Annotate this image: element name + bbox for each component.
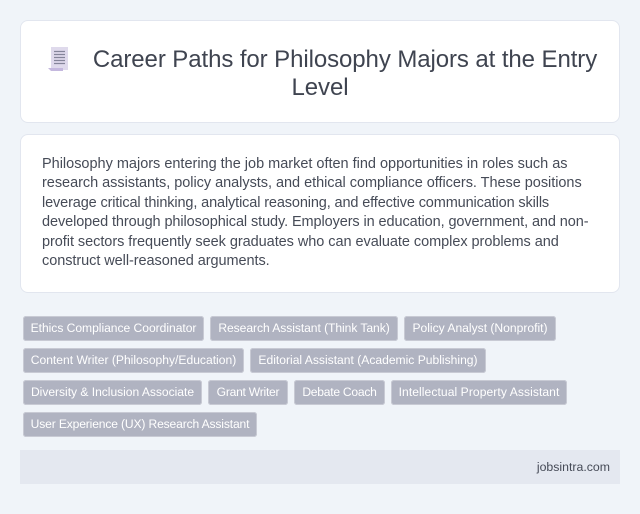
tag: Content Writer (Philosophy/Education) xyxy=(31,353,236,367)
description text xyxy=(42,156,588,269)
icon: document scroll xyxy=(48,47,68,71)
tag: Grant Writer xyxy=(217,385,279,399)
description text: profit sectors frequently seek graduates who can evaluate complex problems and xyxy=(42,234,559,250)
tag: Diversity & Inclusion Associate xyxy=(31,385,194,399)
panel: description card xyxy=(20,134,620,293)
tag xyxy=(294,380,385,405)
footer bar xyxy=(20,450,620,484)
tag: Policy Analyst (Nonprofit) xyxy=(412,321,548,335)
tag xyxy=(23,412,257,437)
tag: Ethics Compliance Coordinator xyxy=(31,321,196,335)
footer source text: jobsintra.com xyxy=(537,460,610,474)
tag xyxy=(208,380,288,405)
tag xyxy=(23,316,204,341)
description text: leverage critical thinking, analytical reasoning, and effective communication skills xyxy=(42,195,549,211)
tag xyxy=(391,380,567,405)
title: Career Paths for Philosophy Majors at the Entry xyxy=(93,46,597,73)
tag: Editorial Assistant (Academic Publishing) xyxy=(258,353,478,367)
tag: Intellectual Property Assistant xyxy=(399,385,559,399)
title xyxy=(93,46,598,101)
panel: title card xyxy=(20,20,620,123)
title: Level xyxy=(292,74,348,101)
panel: job tags xyxy=(23,316,567,437)
tag xyxy=(250,348,486,373)
description text: construct well-reasoned arguments. xyxy=(42,253,270,269)
tag xyxy=(404,316,556,341)
description text: developed through philosophical study. Employers in education, government, and non- xyxy=(42,214,588,230)
tag: Debate Coach xyxy=(302,385,377,399)
tag xyxy=(23,380,202,405)
tag: Research Assistant (Think Tank) xyxy=(218,321,390,335)
tag: User Experience (UX) Research Assistant xyxy=(31,417,249,431)
description text: Philosophy majors entering the job market often find opportunities in roles such as xyxy=(42,156,568,172)
description text: research assistants, policy analysts, and ethical compliance officers. These positions xyxy=(42,175,582,191)
tag xyxy=(210,316,398,341)
tag xyxy=(23,348,244,373)
